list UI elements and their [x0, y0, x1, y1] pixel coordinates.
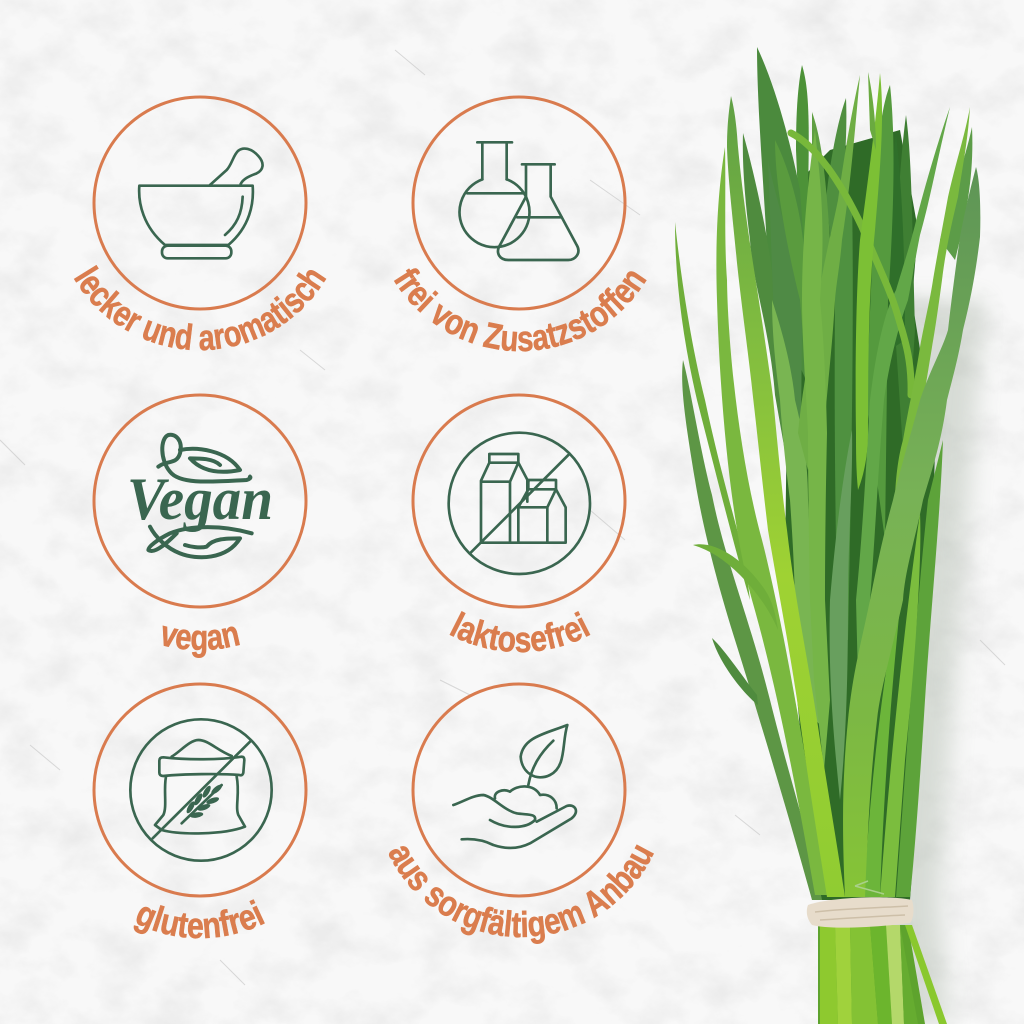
label: lecker und aromatisch: lecker und aromatisch [74, 264, 326, 351]
icon: vegan lettering with leaves [127, 435, 273, 557]
icon: vegan lettering with leaves: Vegan [127, 466, 273, 532]
label: laktosefrei: laktosefrei [450, 611, 590, 653]
panel: laktosefrei [412, 394, 626, 653]
panel: frei von Zusatzstoffen [394, 96, 647, 352]
icon: crossed out milk cartons [449, 433, 590, 574]
panel: glutenfrei [92, 682, 308, 939]
icon: hand with seedling [453, 725, 576, 848]
icon: mortar and pestle [139, 149, 263, 258]
label: glutenfrei: glutenfrei [134, 899, 265, 939]
icon: crossed out grain sack [130, 719, 272, 861]
icon: laboratory flasks [459, 142, 578, 260]
panel: aus sorgfaeltigem Anbau [388, 682, 654, 944]
panel: vegan [92, 394, 308, 658]
label: aus sorgfaeltigem Anbau: aus sorgfältigem Anbau [388, 844, 654, 944]
label: vegan: vegan [162, 626, 240, 658]
panel: lecker und aromatisch [74, 96, 326, 351]
chive bunch photo illustration [675, 47, 985, 1024]
label: frei von Zusatzstoffen: frei von Zusatzstoffen [394, 268, 647, 352]
